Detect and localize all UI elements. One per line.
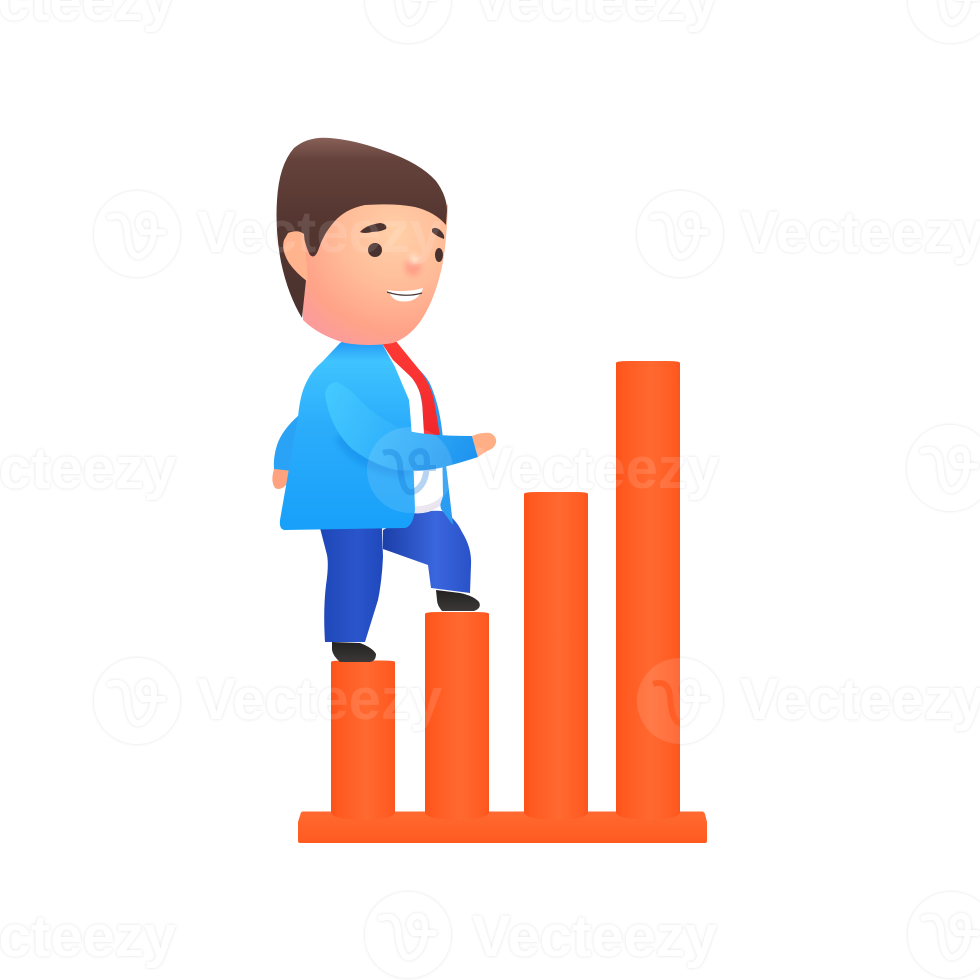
watermark overlay on artwork: Vecteezy [474,436,719,501]
left eyebrow [360,223,386,233]
mouth line [387,292,422,295]
bar chart [298,361,707,843]
back hand [272,469,290,489]
nose highlight [409,254,419,264]
right eye [435,248,443,262]
jacket right panel [415,366,453,525]
watermark layer behind artwork: Vecteezy [740,200,980,265]
jacket body [280,338,415,530]
standing shoe [332,642,376,662]
ear [283,231,308,282]
hair [276,138,447,318]
front arm [325,382,478,471]
watermark layer behind artwork: Vecteezy [197,200,442,265]
raised shoe [436,590,480,611]
shirt [393,360,443,513]
arm shadow on jacket [335,425,413,478]
bar 2 [425,612,489,820]
watermark overlay on artwork: Vecteezy [197,200,442,265]
necktie [379,339,440,436]
watermark layer behind artwork: Vecteezy [474,436,719,501]
chart base [298,812,707,843]
watermark layer behind artwork: Vecteezy [740,667,980,732]
head [276,138,448,345]
bar 3 [524,492,588,820]
watermark overlay on artwork: Vecteezy [197,667,442,732]
standing leg trousers [320,528,383,642]
raised leg trousers [383,511,471,593]
right eyebrow [432,228,444,239]
mouth [387,288,423,302]
watermark overlay on artwork [276,214,680,744]
front hand [472,433,496,457]
left eye [368,243,382,257]
watermark layer behind artwork: Vecteezy [197,667,442,732]
shirt shading [412,495,443,513]
nose [405,258,421,276]
face [303,190,448,345]
businessman character [272,138,496,662]
watermark layer behind artwork: Vecteezy [472,904,717,969]
bar 1 [331,660,395,820]
bar 4 [616,361,680,820]
back arm [274,415,302,471]
